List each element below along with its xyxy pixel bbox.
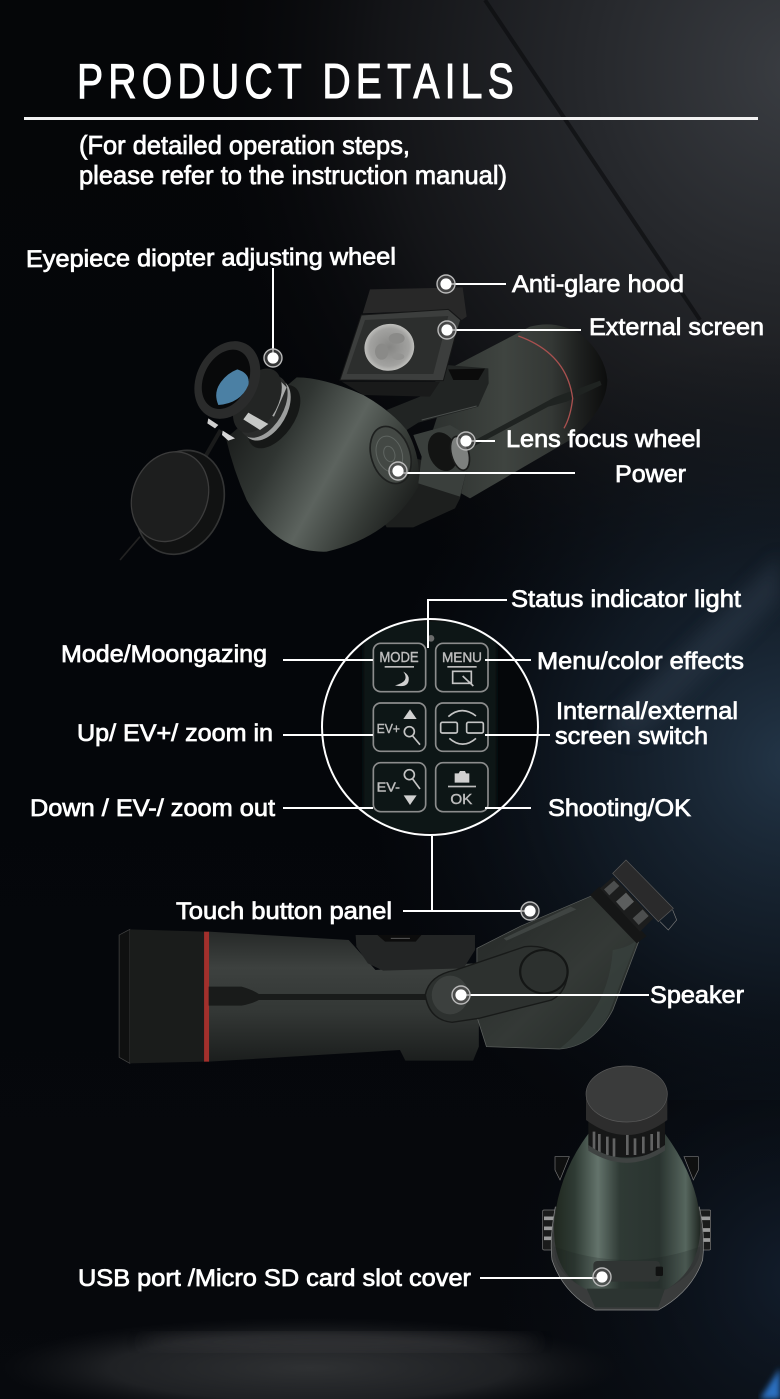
callout: anti-glare hood: Anti-glare hood [512,271,684,298]
speaker housing [425,946,568,1022]
magnifier fill [322,619,538,835]
button: EV plus [373,703,426,751]
side view spotting scope [119,895,640,1063]
callout: external screen: External screen [589,314,764,341]
touch button panel magnifier [322,619,538,835]
main tube [209,932,479,1062]
eyepiece body [477,895,640,1049]
collar [590,887,647,943]
anti-glare hood [363,287,467,320]
callout: status indicator light: Status indicator light [511,586,741,613]
callout: power: Power [615,461,686,488]
strap [203,430,221,460]
external screen [340,309,461,381]
callout: touch button panel: Touch button panel [176,898,392,925]
button: shooting ok: OK [450,792,473,808]
button: mode: MODE [379,650,419,666]
callout: internal/external screen switch [485,698,738,750]
callout: internal/external screen switch: screen switch [555,723,708,750]
button: menu [436,643,488,692]
eyepiece barrel and rings [207,360,311,458]
power button [363,421,418,489]
note text [79,130,507,190]
callout: mode/moongazing: Mode/Moongazing [61,641,267,668]
objective end [119,929,130,1063]
callout: status indicator light [428,586,741,648]
egg body [554,1132,700,1289]
callout: internal/external screen switch: Internal/external [556,698,738,725]
title: PRODUCT DETAILS [77,55,514,109]
objective tube [420,324,607,498]
red ring [204,932,209,1062]
lens cap [120,437,240,568]
outer shell [551,1207,703,1310]
eyepiece bulb [226,377,419,552]
callout: eyepiece diopter adjusting wheel [26,243,396,367]
note text: (For detailed operation steps, [79,130,410,160]
callout: touch button panel [176,836,539,925]
callout: external screen [438,314,764,341]
rear view spotting scope [543,1066,711,1310]
angled spotting scope with external screen [118,287,607,568]
button: EV plus: EV+ [377,722,400,736]
side view eyepiece rings and cup [590,860,677,943]
callout: lens focus wheel: Lens focus wheel [506,426,701,453]
button: screen switch [436,703,488,751]
top screen housing [356,935,475,971]
callout: shooting/ok: Shooting/OK [548,795,691,822]
button: menu: MENU [442,649,482,665]
ring stripes [600,877,653,932]
note text: please refer to the instruction manual) [79,160,507,190]
callout: power [389,461,686,488]
mount rail [387,365,489,430]
cup tab [660,910,677,930]
button: mode [373,643,426,692]
eye cup [182,330,273,430]
button: EV minus [373,763,426,812]
magnifier ring [322,619,538,835]
eye cup [586,1093,667,1135]
callout: eyepiece diopter adjusting wheel: Eyepiece diopter adjusting wheel [26,243,396,273]
button: shooting ok [436,763,488,812]
callout: speaker: Speaker [650,982,744,1009]
callout: anti-glare hood [437,271,684,298]
wings and side wheels [543,1157,711,1250]
callout: usb port and micro sd card slot cover: USB port /Micro SD card slot cover [78,1265,471,1292]
callout: menu/color effects: Menu/color effects [537,648,744,675]
focus ring [588,1120,665,1157]
foot [373,457,467,527]
usb cover [593,1261,660,1282]
callout: speaker [452,982,744,1009]
eye cup [613,860,673,922]
status light [428,635,434,642]
callout: down ev- zoom out: Down / EV-/ zoom out [30,795,275,822]
foot [587,1289,665,1307]
callout: usb port and micro sd card slot cover [78,1265,611,1292]
focus block [413,425,470,497]
button: EV minus: EV- [377,781,400,795]
lens focus wheel [423,428,463,475]
callout: up ev+ zoom in: Up/ EV+/ zoom in [77,720,273,747]
blue lens [216,369,249,405]
moon image [359,318,420,376]
speaker grille [432,976,468,1014]
